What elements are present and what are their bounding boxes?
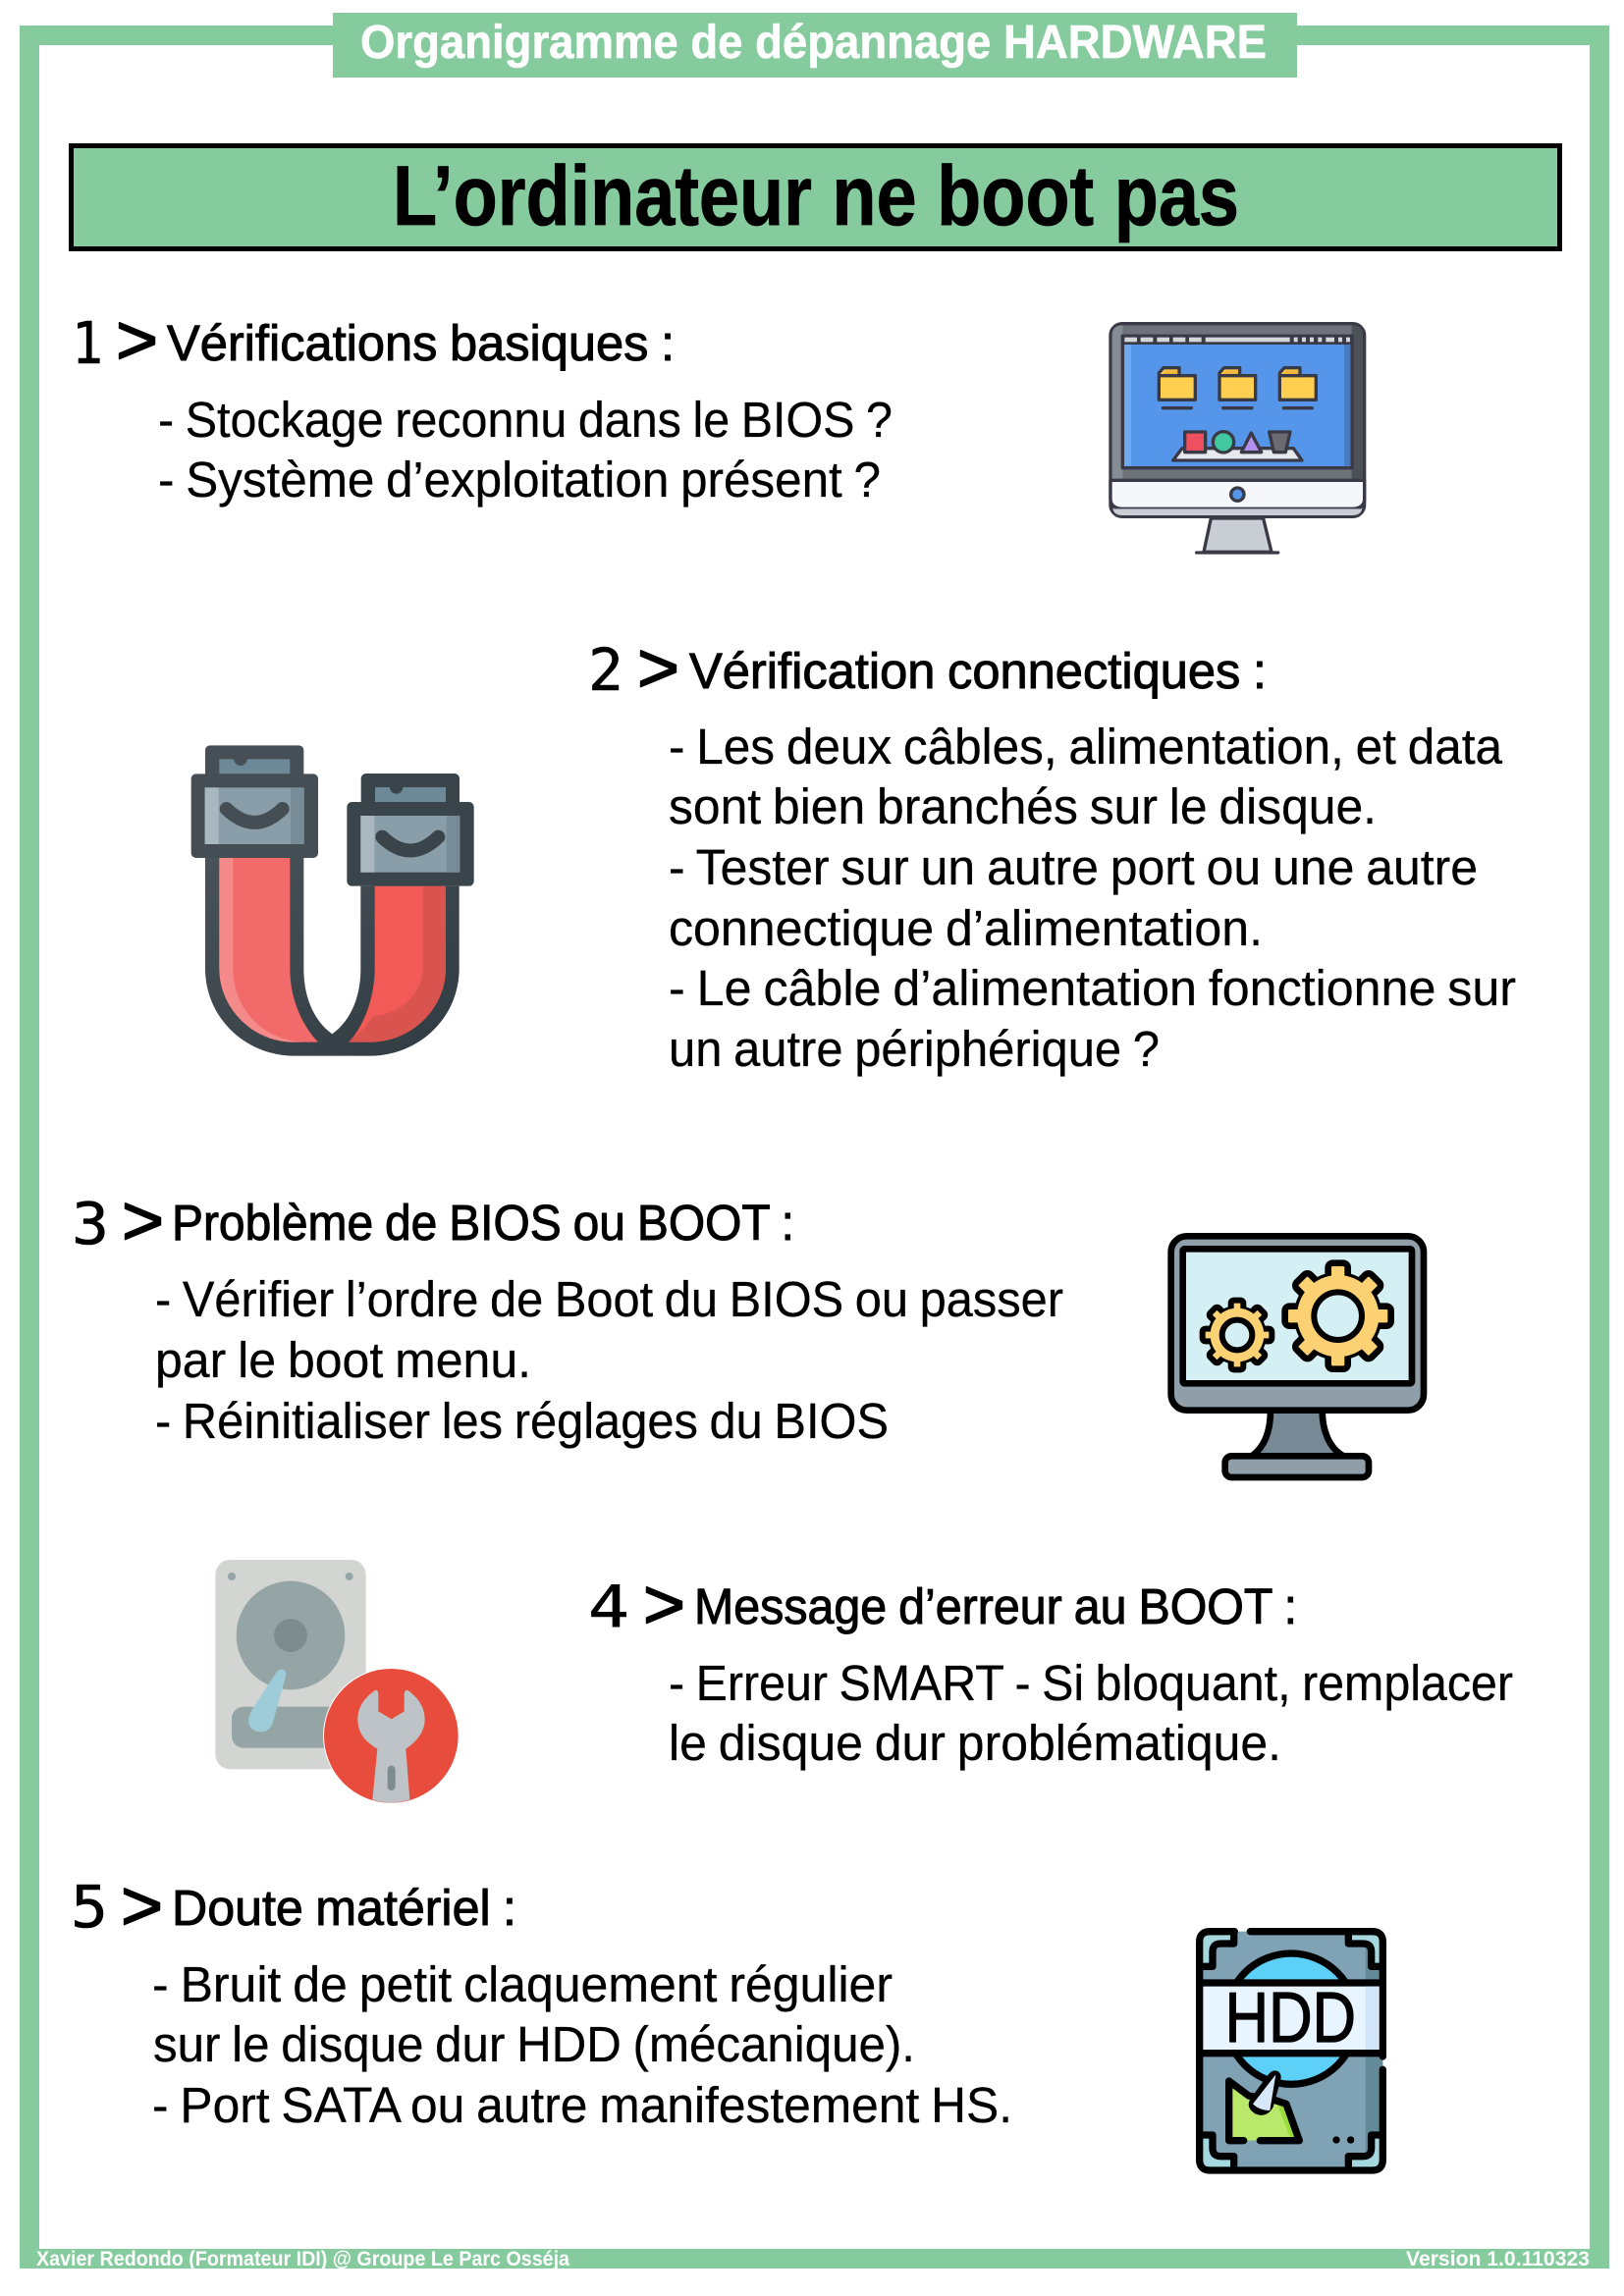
main title [71, 145, 1559, 249]
section 5 text: - Port SATA ou autre manifestement HS. [152, 2077, 1012, 2133]
section 2 text [588, 629, 1516, 1077]
section 4 text: - Erreur SMART - Si bloquant, remplacer [669, 1655, 1513, 1711]
section 3 text: - Réinitialiser les réglages du BIOS [155, 1393, 889, 1449]
section 2 text: > [637, 629, 679, 708]
section 3 text [72, 1182, 1063, 1449]
section 1 text: 1 [72, 309, 103, 377]
section 2 text: 2 [588, 636, 623, 704]
section 2 text: - Le câble d’alimentation fonctionne sur [669, 960, 1516, 1016]
section 5 text: Doute matériel : [172, 1880, 516, 1936]
icon: SATA cable [191, 745, 474, 1056]
section 1 text: - Stockage reconnu dans le BIOS ? [158, 392, 893, 448]
main title: L’ordinateur ne boot pas [393, 149, 1239, 243]
icon: hard drive with wrench [215, 1560, 460, 1804]
right connector [347, 774, 474, 886]
section 5 text: 5 [71, 1873, 108, 1941]
section 4 text: le disque dur problématique. [669, 1715, 1281, 1771]
icon: desktop computer with folders [1110, 324, 1365, 553]
icon: HDD drive [1200, 1932, 1382, 2170]
shelf with shapes [1173, 432, 1302, 460]
footer version: Version 1.0.110323 [1406, 2248, 1590, 2270]
section 1 text: - Système d’exploitation présent ? [158, 452, 881, 507]
section 5 text: > [121, 1867, 163, 1946]
folders [1159, 368, 1316, 408]
section 2 text: sont bien branchés sur le disque. [669, 778, 1377, 834]
large gear [1285, 1263, 1391, 1369]
section 4 text [588, 1566, 1513, 1771]
section 5 text: sur le disque dur HDD (mécanique). [153, 2016, 915, 2072]
section 5 text [71, 1867, 1012, 2133]
section 5 text: - Bruit de petit claquement régulier [152, 1956, 893, 2012]
section 2 text: Vérification connectiques : [689, 643, 1267, 699]
section 4 text: > [643, 1566, 685, 1644]
section 2 text: un autre périphérique ? [669, 1021, 1160, 1077]
section 3 text: > [122, 1182, 164, 1260]
section 4 text: 4 [588, 1573, 629, 1640]
section 1 text: Vérifications basiques : [167, 315, 675, 371]
green actuator area [1229, 2081, 1299, 2141]
top ribbon: Organigramme de dépannage HARDWARE [360, 17, 1267, 69]
section 1 text: > [116, 301, 158, 380]
section 2 text: - Tester sur un autre port ou une autre [669, 839, 1478, 895]
small gear [1203, 1301, 1272, 1369]
section 4 text: Message d’erreur au BOOT : [694, 1578, 1297, 1634]
section 3 text: par le boot menu. [155, 1332, 531, 1388]
section 3 text: 3 [72, 1190, 109, 1257]
left connector [191, 745, 318, 858]
icon: monitor with gears [1171, 1236, 1424, 1477]
footer author credit: Xavier Redondo (Formateur IDI) @ Groupe Le Parc Osséja [36, 2248, 569, 2270]
section 3 text: - Vérifier l’ordre de Boot du BIOS ou passer [155, 1271, 1063, 1327]
section 2 text: - Les deux câbles, alimentation, et data [669, 719, 1503, 774]
section 3 text: Problème de BIOS ou BOOT : [172, 1195, 794, 1251]
section 1 text [72, 301, 893, 507]
HDD label: HDD [1225, 1979, 1356, 2057]
section 2 text: connectique d’alimentation. [669, 900, 1263, 956]
